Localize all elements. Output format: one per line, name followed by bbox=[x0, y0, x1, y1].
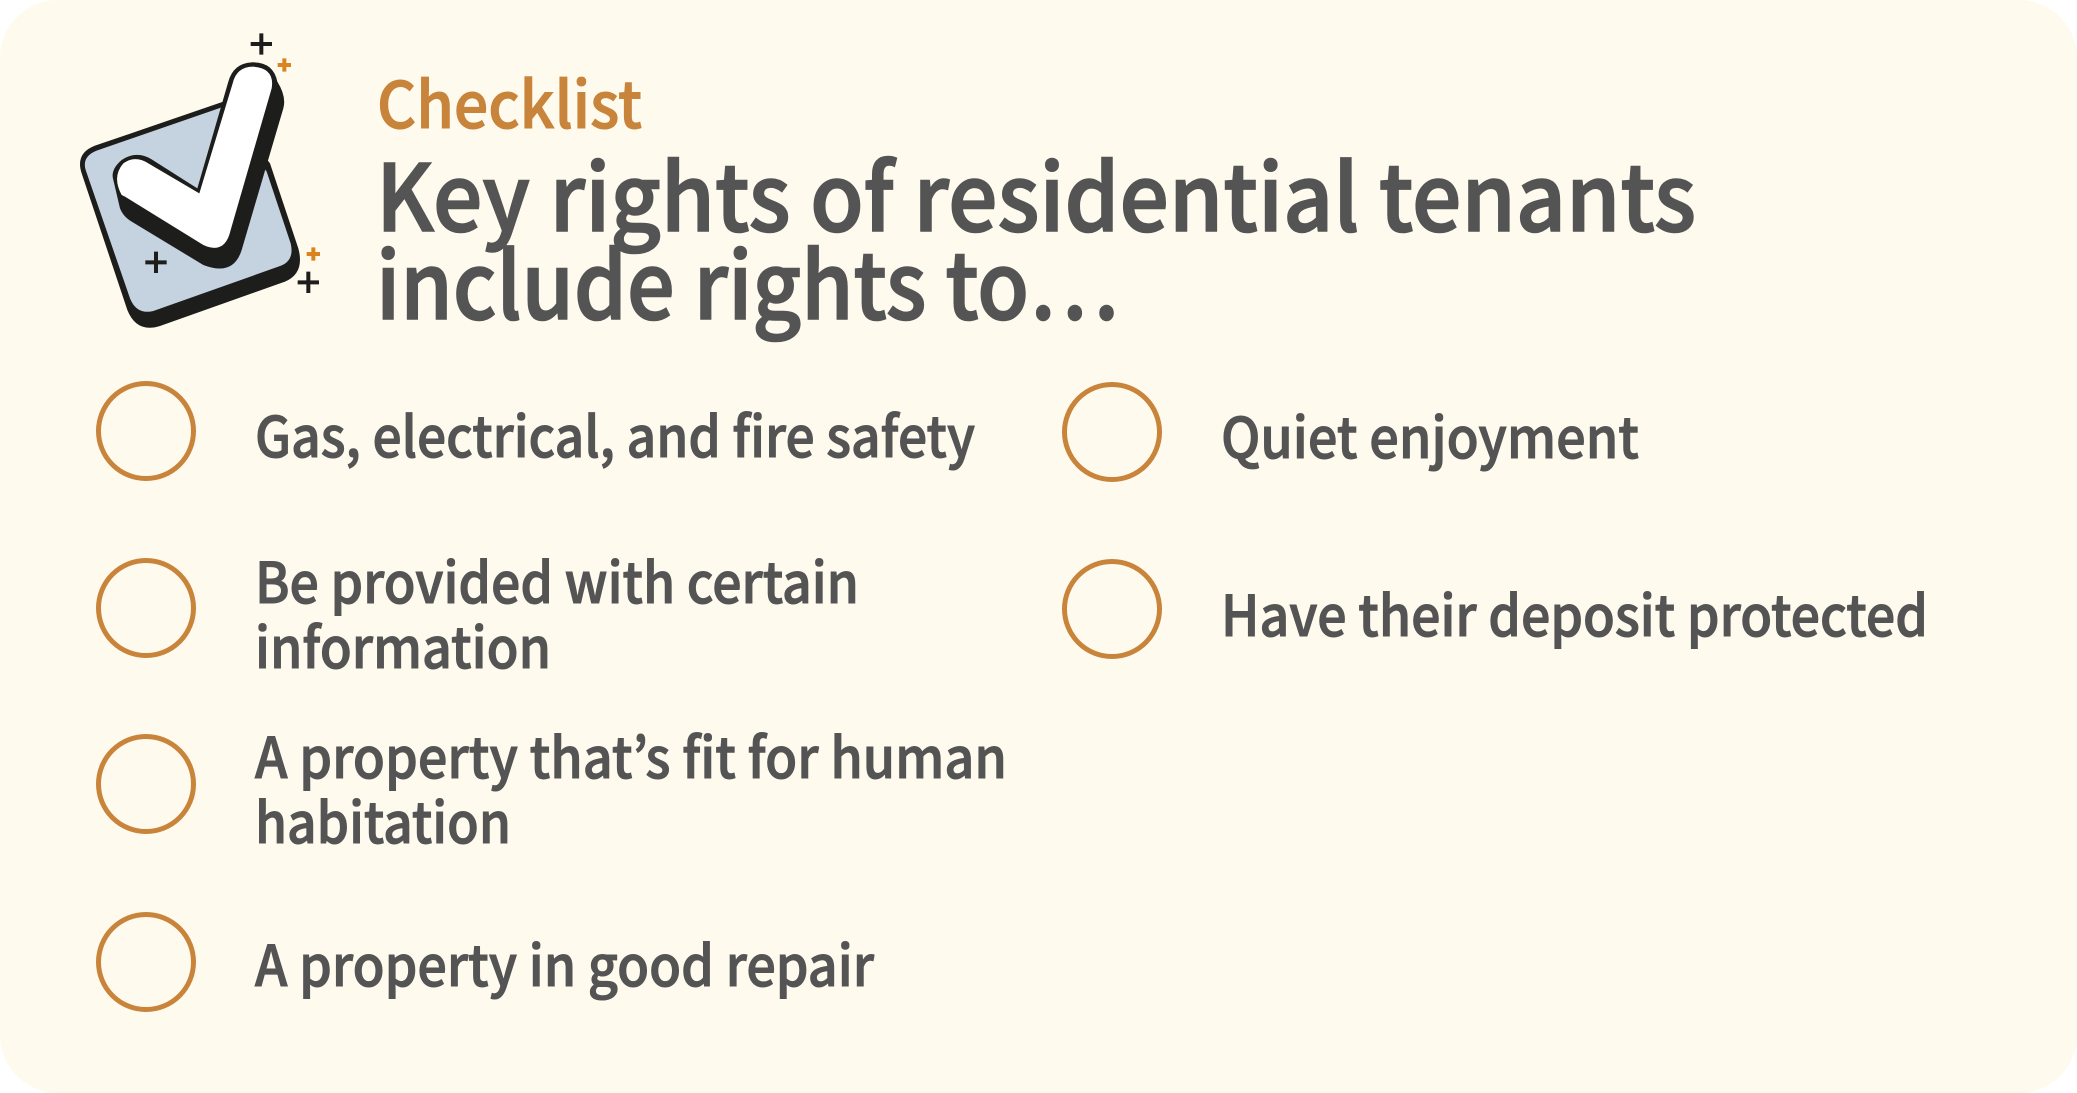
checklist item: quiet enjoyment bbox=[1064, 384, 1639, 480]
title: Key rights of residential tenants bbox=[376, 125, 1696, 258]
checklist item: certain information: information bbox=[255, 604, 551, 685]
checklist item: quiet enjoyment: Quiet enjoyment bbox=[1221, 394, 1639, 475]
checklist item: good repair bbox=[98, 914, 875, 1010]
checklist item: fit for human habitation bbox=[98, 714, 1007, 860]
eyebrow heading: Checklist: Checklist bbox=[377, 55, 642, 147]
title: include rights to… bbox=[376, 213, 1119, 346]
checklist item: fit for human habitation: A property that’s fit for human bbox=[255, 714, 1007, 795]
checklist item: gas, electrical and fire safety bbox=[98, 384, 975, 478]
checklist item: fit for human habitation: habitation bbox=[255, 779, 511, 860]
checklist item: good repair: A property in good repair bbox=[255, 922, 875, 1003]
checklist item: deposit protected bbox=[1064, 562, 1928, 656]
checklist item: deposit protected: Have their deposit protected bbox=[1221, 572, 1928, 653]
checklist item: certain information: Be provided with certain bbox=[255, 539, 859, 620]
icon: tilted checkbox with tick bbox=[80, 33, 320, 328]
checklist item: certain information bbox=[98, 539, 859, 685]
title bbox=[376, 125, 1696, 346]
checklist item: gas, electrical and fire safety: Gas, electrical, and fire safety bbox=[255, 393, 975, 474]
